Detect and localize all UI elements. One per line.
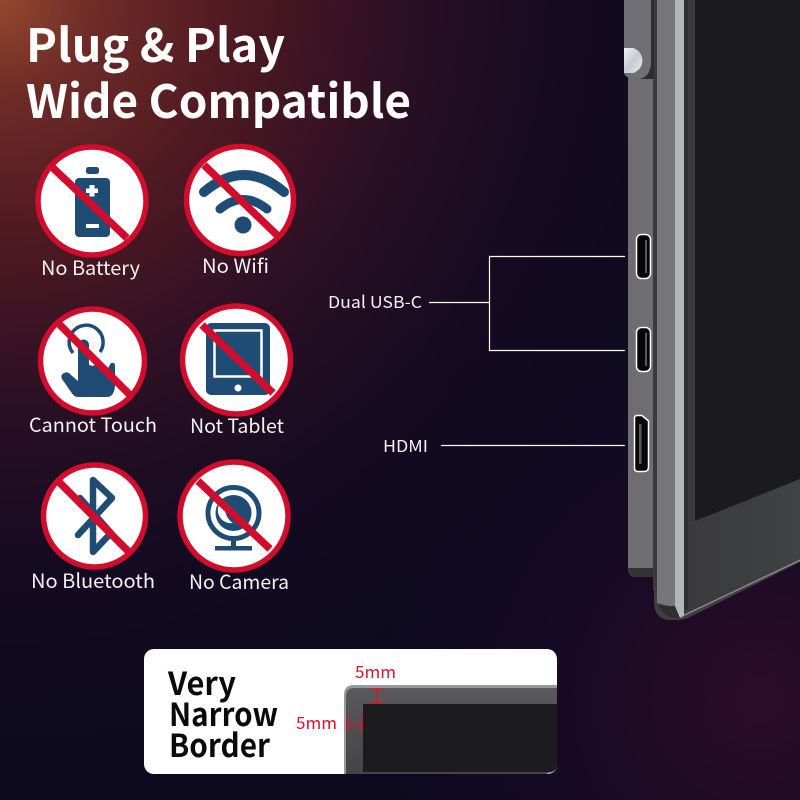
panel heading: Narrow	[169, 690, 278, 736]
icon: no battery	[38, 147, 146, 255]
measure: top 5mm	[355, 659, 396, 703]
monitor bezel	[684, 0, 800, 616]
monitor screen	[695, 0, 800, 521]
label: no wifi: No Wifi	[202, 250, 269, 279]
port: usb-c bottom	[636, 328, 650, 372]
panel: very narrow border	[144, 649, 557, 774]
icon: no camera	[180, 462, 288, 570]
label: cannot touch: Cannot Touch	[29, 409, 157, 438]
port: usb-c top	[636, 234, 650, 278]
icon: not tablet	[182, 306, 290, 414]
label: no camera: No Camera	[189, 566, 289, 595]
monitor side view	[624, 0, 800, 620]
monitor edge	[657, 0, 675, 606]
icon: no wifi	[186, 146, 294, 254]
screen corner photo	[344, 685, 557, 774]
icon: cannot touch	[40, 309, 144, 413]
measure: left 5mm	[296, 710, 362, 734]
measure: top 5mm: 5mm	[355, 659, 396, 683]
icon: no bluetooth	[44, 465, 146, 567]
hinge knob	[624, 48, 642, 73]
panel heading: Border	[169, 721, 270, 767]
measure: left 5mm: 5mm	[296, 710, 337, 734]
panel heading	[167, 659, 278, 767]
title: Plug & Play	[26, 10, 285, 76]
callout: dual usb-c: Dual USB-C	[328, 289, 422, 313]
label: not tablet: Not Tablet	[190, 410, 285, 439]
port: hdmi	[634, 416, 648, 472]
label: no battery: No Battery	[41, 252, 140, 281]
title	[26, 10, 411, 132]
monitor front shell	[653, 0, 800, 620]
monitor back panel	[628, 0, 653, 577]
label: no bluetooth: No Bluetooth	[31, 565, 155, 594]
panel heading: Very	[167, 659, 236, 705]
title: Wide Compatible	[26, 66, 411, 132]
hinge bracket	[624, 0, 652, 78]
callout: dual usb-c	[328, 256, 625, 350]
callout: hdmi: HDMI	[383, 433, 428, 457]
